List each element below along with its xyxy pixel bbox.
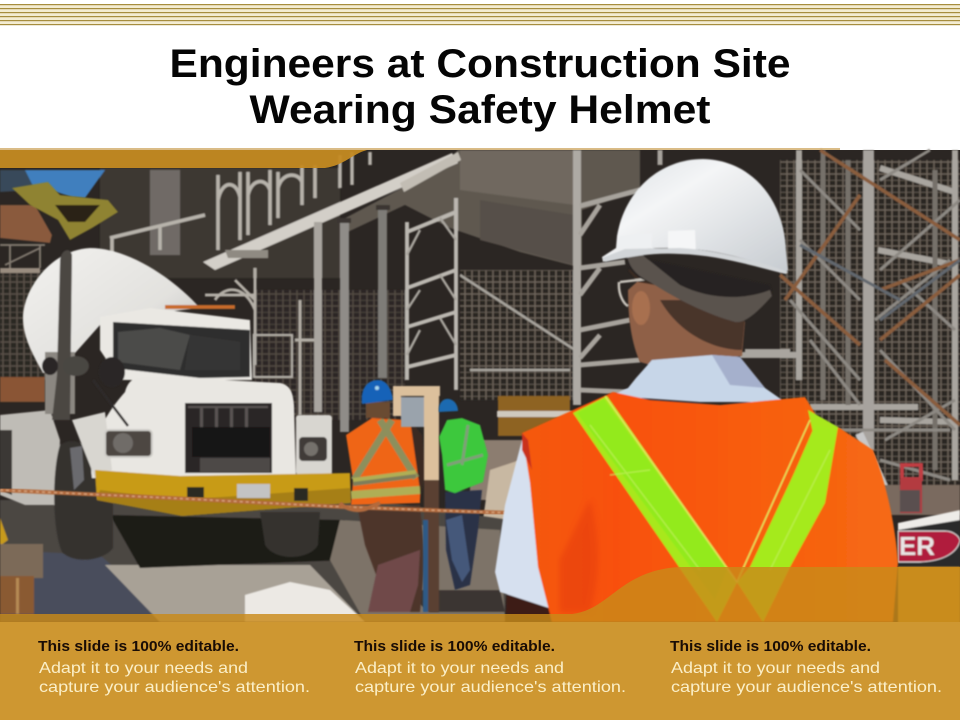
left behind vest <box>470 440 530 500</box>
text block 1: This slide is 100% editable. <box>38 639 239 655</box>
jeans <box>445 490 482 590</box>
photo: construction site <box>0 148 960 720</box>
text block 2 <box>354 639 626 696</box>
arm <box>506 585 555 622</box>
trousers <box>358 505 425 612</box>
columns <box>314 222 322 412</box>
title: Engineers at Construction Site <box>170 42 790 86</box>
head and neck <box>628 270 745 366</box>
front tyre <box>260 512 320 557</box>
worker in green shirt <box>439 399 488 590</box>
headlights <box>105 430 152 457</box>
right background wood <box>880 485 960 515</box>
text block 3: This slide is 100% editable. <box>670 639 871 655</box>
top gold wave band <box>0 148 840 168</box>
mixer drum <box>23 248 200 373</box>
shirt <box>439 418 488 493</box>
yellow crate <box>498 396 570 436</box>
worker with blue helmet and orange vest <box>346 380 426 612</box>
shirt sleeve <box>495 430 555 610</box>
yellow bumper <box>95 470 351 516</box>
sky <box>18 170 105 198</box>
warning sign and red bottle: ER <box>899 531 935 561</box>
left building <box>100 168 340 278</box>
rope <box>0 490 510 513</box>
collar <box>610 355 785 402</box>
centre scaffold tower <box>407 198 456 390</box>
main white beam <box>203 153 458 270</box>
background: building and scaffolding <box>0 150 960 612</box>
ground <box>0 500 510 622</box>
mirror <box>63 356 89 376</box>
wood crate <box>0 544 43 578</box>
wooden plank frame <box>393 386 440 612</box>
white helmet <box>602 159 788 273</box>
exhaust pipe <box>52 250 72 420</box>
text block 3 <box>670 639 942 696</box>
net texture <box>460 270 575 400</box>
ceiling <box>262 150 640 268</box>
text block 2: Adapt it to your needs and <box>355 660 564 677</box>
helmet <box>439 399 458 412</box>
top stripes <box>0 4 960 25</box>
title <box>170 42 790 132</box>
hood <box>91 376 296 478</box>
right scaffolding <box>740 150 955 480</box>
rear tyre <box>54 441 113 560</box>
concrete mixer truck <box>0 182 351 560</box>
reflective straps <box>573 396 838 622</box>
white arches upper left <box>110 152 370 255</box>
bottom wave overlay <box>0 567 960 622</box>
bottom text panel <box>0 622 960 720</box>
vest <box>346 418 420 505</box>
main engineer from behind <box>495 159 898 622</box>
text block 1: capture your audience's attention. <box>39 679 310 696</box>
cab <box>100 308 252 380</box>
warning sign and red bottle <box>898 465 960 623</box>
crane claw <box>12 182 118 240</box>
text block 3: Adapt it to your needs and <box>671 660 880 677</box>
text block 3: capture your audience's attention. <box>671 679 942 696</box>
brown scaffold platform <box>0 205 52 243</box>
text block 2: capture your audience's attention. <box>355 679 626 696</box>
lower scaffold frames <box>205 268 315 415</box>
text block 1 <box>38 639 310 696</box>
glasses <box>619 278 655 306</box>
text block 1: Adapt it to your needs and <box>39 660 248 677</box>
orange vest <box>522 392 898 622</box>
helmet interior and strap <box>627 255 772 322</box>
neck <box>366 402 390 418</box>
blue arm <box>410 420 426 500</box>
grille <box>185 403 272 473</box>
blue helmet <box>362 380 393 404</box>
title: Wearing Safety Helmet <box>250 88 710 132</box>
text block 2: This slide is 100% editable. <box>354 639 555 655</box>
rear chassis <box>0 410 60 505</box>
near tower left <box>573 150 581 405</box>
